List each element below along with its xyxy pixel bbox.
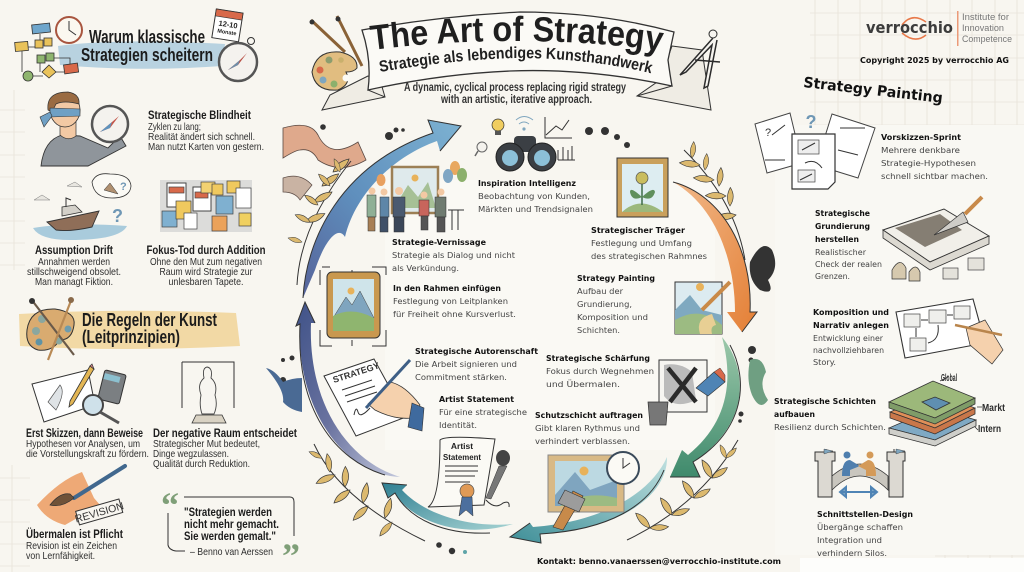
item: Erst Skizzen, dann Beweise <box>26 364 149 460</box>
text: Erst Skizzen: Erst Skizzen, dann Beweise <box>26 428 143 440</box>
text: Artist Statement <box>439 395 514 404</box>
text: Schnittstellen-Design <box>817 510 913 519</box>
text: Strategischer Träger <box>591 226 685 235</box>
text: Assumption Drift: Annahmen werden <box>38 256 110 268</box>
text: Übermalen: von Lernfähigkeit. <box>26 550 95 562</box>
cycle ribbon decoration <box>283 125 366 200</box>
text: Strategische Blindheit: Realität ändert sich schnell. <box>148 131 255 143</box>
step: Strategische Autorenschaft <box>324 347 538 436</box>
icon: framed flower <box>617 158 668 217</box>
text: Komposition und <box>577 313 648 322</box>
text: Der negative Raum: Der negative Raum entscheidet <box>153 428 297 440</box>
icon: brush with revision stamp: REVISION <box>74 500 125 526</box>
icon: wall of notes <box>160 180 252 232</box>
arrow: teal bottom-right <box>510 457 667 543</box>
quote text <box>184 507 279 558</box>
text: Strategische <box>815 209 871 218</box>
text: und Übermalen. <box>546 379 620 389</box>
text: schnell sichtbar machen. <box>881 172 988 181</box>
tagline <box>404 82 626 106</box>
logo: verrocchio: Competence <box>962 34 1012 44</box>
quote text: – Benno van Aerssen <box>190 546 273 558</box>
title banner <box>310 11 720 111</box>
icon: clock <box>56 17 82 43</box>
title text: The Art of Strategy <box>369 16 664 57</box>
text: Integration und <box>817 536 882 545</box>
icon: scroll with seal and microphone: Artist <box>451 441 473 451</box>
tagline: A dynamic, cyclical process replacing rigid strategy <box>404 82 626 94</box>
text: Übergänge schaffen <box>817 522 903 532</box>
quote text: nicht mehr gemacht. <box>184 519 279 531</box>
step: Artist Statement <box>428 395 527 516</box>
text: Beobachtung von Kunden, <box>478 192 590 201</box>
text: Resilienz durch Schichten. <box>774 423 886 432</box>
icon: towers and bridge <box>815 449 905 497</box>
heading text <box>82 310 217 347</box>
item: Fokus-Tod durch Addition <box>146 180 266 288</box>
logo: verrocchio: verrocchio <box>866 18 953 37</box>
text: Erst Skizzen <box>26 428 149 460</box>
laurel: bottom left <box>309 444 425 541</box>
text: Fokus-Tod durch Addition <box>146 245 266 288</box>
icon: calendar 12-10 Monate: 12-10 <box>218 19 238 30</box>
step: In den Rahmen einfügen <box>320 267 516 346</box>
heading text: (Leitprinzipien) <box>82 327 180 347</box>
splatter: dots and blobs <box>280 124 775 554</box>
text: Fokus-Tod durch Addition: unlesbaren Tapete. <box>168 276 244 288</box>
text <box>591 226 707 261</box>
arrow: blue top-left <box>303 120 461 298</box>
text: Aufbau der <box>577 287 624 296</box>
text: Strategie-Vernissage <box>392 238 487 247</box>
text: Narrativ anlegen <box>813 321 889 330</box>
text: aufbauen <box>774 410 815 419</box>
step: Strategische Schärfung <box>546 354 725 425</box>
text <box>813 308 889 367</box>
laurel: top right <box>679 141 745 260</box>
text <box>546 354 654 389</box>
arrow: green right <box>670 337 740 477</box>
text: Fokus-Tod durch Addition: Raum wird Strategie zur <box>160 266 253 278</box>
heading wash <box>58 41 225 69</box>
text: Entwicklung einer <box>813 334 884 343</box>
text: Der negative Raum: Strategischer Mut bedeutet, <box>153 438 260 450</box>
heading text <box>81 27 213 65</box>
icon: drafting compass <box>680 30 720 88</box>
text: Die Arbeit signieren und <box>415 360 517 369</box>
text: Übermalen: Übermalen ist Pflicht <box>26 528 123 541</box>
laurel: bottom right <box>627 440 739 540</box>
text: Erst Skizzen: Hypothesen vor Analysen, um <box>26 438 140 450</box>
icon: opening quote mark: “ <box>161 485 179 525</box>
quote text: Sie werden gemalt." <box>184 531 276 543</box>
icon: boat with thought cloud <box>33 174 131 240</box>
text <box>393 284 516 319</box>
subtitle text: Strategie als lebendiges Kunsthandwerk <box>380 46 653 74</box>
icon: varnished picture, clock, brush <box>548 452 639 530</box>
text: Festlegung von Leitplanken <box>393 297 508 306</box>
text: Assumption Drift <box>27 245 121 288</box>
right: Strategische Schichten <box>774 372 1005 446</box>
tagline: with an artistic, iterative approach. <box>440 94 592 106</box>
text: Assumption Drift: stillschweigend obsolet. <box>27 266 121 278</box>
text: Strategische Schärfung <box>546 354 650 363</box>
text: Realistischer <box>815 248 867 257</box>
right: Vorskizzen-Sprint <box>755 112 988 189</box>
heading: Strategy Painting: Strategy Painting <box>803 75 943 107</box>
text: Strategy Painting <box>577 274 655 283</box>
quote text: "Strategien werden <box>184 507 272 519</box>
text: Übermalen <box>26 528 123 562</box>
text <box>774 397 886 432</box>
step: Strategie-Vernissage <box>367 161 515 273</box>
icon: flowchart <box>15 23 79 81</box>
text: Übermalen: Revision ist ein Zeichen <box>26 540 117 552</box>
icon: blindfolded person with compass <box>40 92 128 166</box>
text <box>817 510 913 558</box>
arrow: teal bottom-left <box>382 483 513 533</box>
text: Strategie als Dialog und nicht <box>392 251 515 260</box>
text: Der negative Raum: Qualität durch Reduktion. <box>153 458 250 470</box>
text: Grundierung <box>815 222 870 231</box>
text: Identität. <box>439 421 477 430</box>
text <box>815 209 882 281</box>
icon: canvas with trowel <box>883 197 989 281</box>
icon: scroll with seal and microphone: Statement <box>443 452 481 462</box>
text: Assumption Drift: Assumption Drift <box>35 245 113 257</box>
icon: boat with thought cloud: ? <box>112 206 123 226</box>
text: Erst Skizzen: die Vorstellungskraft zu fördern. <box>26 448 149 460</box>
icon: pocket compass <box>219 38 257 81</box>
item: Übermalen ist Pflicht <box>26 466 125 562</box>
text: Strategische Blindheit: Man nutzt Karten von gestern. <box>148 141 264 153</box>
text <box>439 395 527 430</box>
panel: Warum klassische Strategien scheitern <box>15 9 257 81</box>
heading text: Strategien scheitern <box>81 45 213 65</box>
text: Gibt klaren Rythmus und <box>535 424 640 433</box>
icon: sketch, pencil, calculator, magnifier <box>32 364 126 423</box>
heading text: Die Regeln der Kunst <box>82 310 217 330</box>
text: Strategische Blindheit: Strategische Blindheit <box>148 110 251 122</box>
text <box>881 133 988 181</box>
text: layer labels <box>941 372 1005 435</box>
item: Strategische Blindheit <box>40 92 264 166</box>
splatter: green <box>748 359 768 405</box>
text: des strategischen Rahmnes <box>591 252 707 261</box>
text: Strategische Schichten <box>774 397 876 406</box>
text: Der negative Raum: Dinge wegzulassen. <box>153 448 229 460</box>
laurel: top left <box>288 158 352 285</box>
text: Märkten und Trendsignalen <box>478 205 593 214</box>
ribbon <box>322 12 711 110</box>
icon: binoculars with signals <box>475 116 575 171</box>
icon: crossed out, eraser, bin <box>648 360 725 425</box>
heading text: Warum klassische <box>89 27 205 47</box>
text: Inspiration Intelligenz <box>478 179 576 188</box>
text: Vorskizzen-Sprint <box>881 133 961 142</box>
icon: signing hand: STRATEGY <box>332 360 381 385</box>
text <box>392 238 515 273</box>
text: für Freiheit ohne Kursverlust. <box>393 310 516 319</box>
icon: scroll with seal and microphone <box>428 437 510 516</box>
right: Komposition und Narrativ <box>813 299 1003 367</box>
icon: framed mountain with guides <box>320 267 386 346</box>
heading wash <box>19 311 240 349</box>
logo: verrocchio: Institute for <box>962 12 1009 22</box>
item: Assumption Drift <box>27 174 131 288</box>
arrow: orange right <box>673 182 757 332</box>
icon: calendar 12-10 Monate: Monate <box>217 28 237 37</box>
icon: storyboard with hand <box>896 299 1003 364</box>
text <box>478 179 593 214</box>
icon: gallery scene <box>367 161 467 232</box>
text: Schutzschicht auftragen <box>535 411 643 420</box>
text: Assumption Drift: Man managt Fiktion. <box>35 276 113 288</box>
text: als Verkündung. <box>392 264 459 273</box>
icon: three sketch sheets: ? <box>806 112 816 132</box>
text: Commitment stärken. <box>415 373 507 382</box>
text: Komposition und <box>813 308 889 317</box>
right: Strategische Grundierung <box>815 197 989 281</box>
text: Fokus durch Wegnehmen <box>546 367 654 376</box>
text: layer labels: Intern <box>978 423 1001 435</box>
text: layer labels: Global <box>941 372 957 384</box>
text: Grenzen. <box>815 272 850 281</box>
text: Festlegung und Umfang <box>591 239 692 248</box>
text: verhindern Silos. <box>817 549 887 558</box>
icon: stacked layers <box>889 377 982 446</box>
text: Strategie-Hypothesen <box>881 159 976 168</box>
text <box>415 347 538 382</box>
text: Strategische Blindheit <box>148 110 264 153</box>
text: Fokus-Tod durch Addition: Fokus-Tod durch Addition <box>146 245 266 257</box>
icon: calendar 12-10 Monate <box>212 9 243 42</box>
contact line: Kontakt: benno.vanaerssen@verrocchio-institute.com <box>537 557 781 566</box>
panel: Die Regeln der Kunst <box>19 297 240 360</box>
text: layer labels: Markt <box>982 402 1005 414</box>
copyright: Copyright 2025 by verrocchio AG <box>860 56 1009 65</box>
text: verhindert verblassen. <box>535 437 630 446</box>
text <box>577 274 655 335</box>
text <box>535 411 643 446</box>
icon: boat with thought cloud: ? <box>120 181 127 193</box>
icon: palette with brushes <box>27 297 74 360</box>
text: Story. <box>813 358 836 367</box>
text: herstellen <box>815 235 859 244</box>
text: Mehrere denkbare <box>881 146 960 155</box>
splatter: blue <box>266 368 302 412</box>
callout: quote <box>161 485 300 572</box>
logo: verrocchio: Innovation <box>962 23 1004 33</box>
text: Strategische Autorenschaft <box>415 347 538 356</box>
icon: three sketch sheets <box>755 112 875 189</box>
right: Schnittstellen-Design <box>815 449 913 558</box>
item: Der negative Raum entscheidet <box>153 362 297 470</box>
text: Schichten. <box>577 326 620 335</box>
icon: three sketch sheets: ? <box>765 127 771 139</box>
text: Fokus-Tod durch Addition: Ohne den Mut zum negativen <box>150 256 262 268</box>
text: Strategische Blindheit: Zyklen zu lang; <box>148 121 201 133</box>
text: nachvollziehbaren <box>813 346 884 355</box>
text: Grundierung, <box>577 300 632 309</box>
step: Strategischer Träger <box>591 158 707 261</box>
arrow: purple left <box>296 302 400 477</box>
icon: landscape with brush <box>675 282 730 334</box>
step: Inspiration Intelligenz <box>475 116 593 214</box>
step: Strategy Painting <box>577 274 730 335</box>
text: Check der realen <box>815 260 882 269</box>
icon: sculpture in frame <box>182 362 234 423</box>
text: In den Rahmen einfügen <box>393 284 501 293</box>
step: Schutzschicht auftragen <box>535 411 643 530</box>
icon: palette and brushes <box>310 16 362 90</box>
logo: verrocchio <box>866 11 1012 46</box>
text: Für eine strategische <box>439 408 527 417</box>
icon: signing hand <box>324 359 424 436</box>
text: Der negative Raum <box>153 428 297 470</box>
